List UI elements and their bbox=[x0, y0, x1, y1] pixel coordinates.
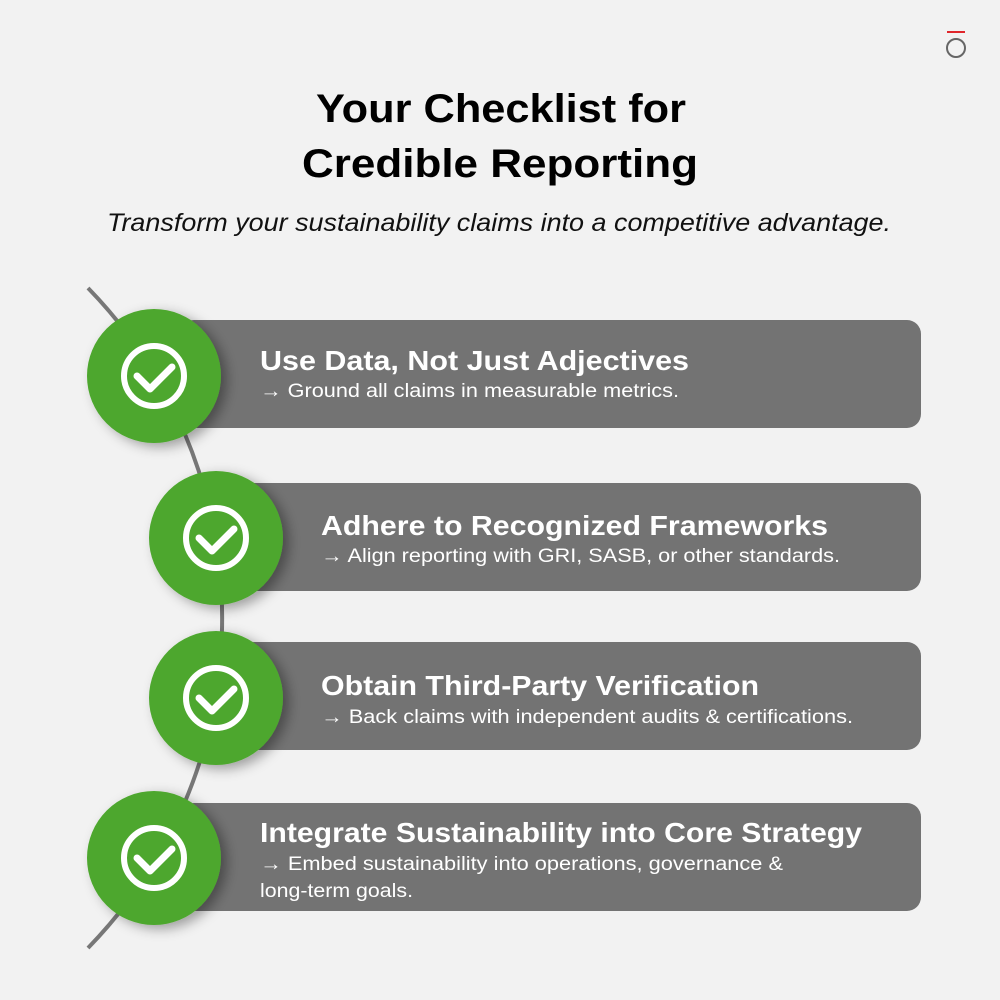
item 3 bbox=[149, 631, 921, 765]
item 3: → Back claims with independent audits & certifications. bbox=[321, 707, 853, 728]
logo bbox=[947, 31, 965, 57]
item 2: → Align reporting with GRI, SASB, or other standards. bbox=[321, 546, 840, 567]
item 2: Adhere to Recognized Frameworks bbox=[321, 510, 828, 541]
item 1: Use Data, Not Just Adjectives bbox=[260, 345, 689, 376]
item 4 bbox=[87, 791, 921, 925]
item 2 bbox=[149, 471, 921, 605]
item 4: long-term goals. bbox=[260, 881, 413, 902]
timeline arc bbox=[88, 288, 222, 948]
item 3: Obtain Third-Party Verification bbox=[321, 670, 759, 701]
item 1 bbox=[87, 309, 921, 443]
subtitle: Transform your sustainability claims into a competitive advantage. bbox=[107, 209, 891, 237]
title: Credible Reporting bbox=[302, 142, 698, 186]
item 4: → Embed sustainability into operations, governance & bbox=[260, 854, 783, 875]
title bbox=[302, 87, 698, 186]
item 1: → Ground all claims in measurable metrics. bbox=[260, 381, 679, 402]
item 4: Integrate Sustainability into Core Strategy bbox=[260, 817, 862, 848]
title: Your Checklist for bbox=[316, 87, 686, 131]
